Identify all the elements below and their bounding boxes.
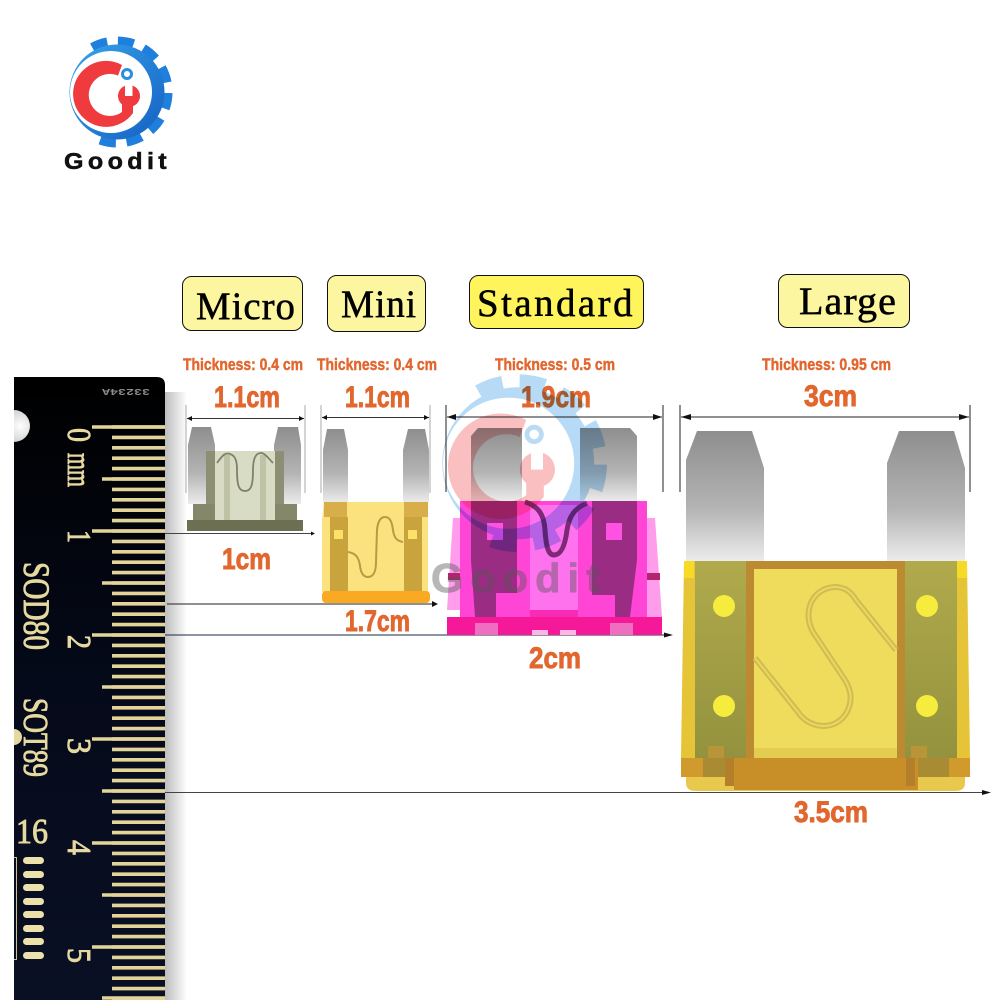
fuse base (681, 746, 970, 791)
fuse: Mini (322, 429, 430, 603)
thickness: Mini: Thickness: 0.4 cm (317, 356, 437, 374)
ruler scale numbers: 3 (60, 738, 97, 754)
ruler (0, 370, 165, 1000)
ruler part code: 33234A (101, 386, 150, 396)
fuse: Large (681, 431, 970, 791)
ruler package labels: SOD80 (15, 562, 56, 650)
fuse: Standard (447, 428, 662, 635)
thickness: Micro: Thickness: 0.4 cm (183, 356, 303, 374)
label: Mini (328, 276, 426, 332)
fuse: Micro (187, 427, 303, 531)
fuse body (681, 561, 970, 758)
width dimension: Standard 1.9cm: 1.9cm (521, 381, 591, 414)
width dimension: Mini 1.1cm (321, 381, 430, 493)
horizontal reference: 1.7cm line (167, 601, 438, 607)
width dimension: Micro 1.1cm: 1.1cm (214, 381, 280, 414)
label: Large (778, 274, 910, 328)
horizontal reference: 2cm line (165, 632, 673, 638)
ruler SOIC pads (14, 857, 44, 960)
fuse blades (686, 431, 965, 561)
logo wordmark: Goodit (64, 148, 171, 174)
ruler shadow (165, 392, 187, 1000)
ruler package labels: 16 (16, 812, 48, 851)
thickness: Large: Thickness: 0.95 cm (762, 356, 891, 374)
label: Standard: Standard (477, 282, 635, 325)
ruler package labels (14, 562, 56, 851)
width dimension: Large 3cm: 3cm (804, 380, 857, 413)
horizontal reference: 1cm line (165, 532, 315, 536)
width dimension: Mini 1.1cm: 1.1cm (345, 381, 410, 414)
dimension text: 3.5cm: 3.5cm (794, 796, 868, 829)
dimension text: 1.7cm: 1.7cm (345, 605, 410, 638)
label: Mini: Mini (341, 283, 417, 326)
ruler scale numbers (60, 428, 97, 963)
dimension text: 1cm: 1cm (222, 543, 271, 576)
ruler scale numbers: 5 (60, 948, 97, 963)
fuse rivets (713, 595, 938, 717)
horizontal reference: 3.5cm line (165, 790, 991, 795)
label: Micro: Micro (196, 285, 296, 328)
label: Large: Large (799, 280, 897, 323)
ruler scale numbers: mm (60, 453, 97, 487)
ruler scale numbers: 1 (60, 530, 97, 543)
width dimension: Large 3cm (680, 380, 970, 492)
ruler scale numbers: 2 (60, 635, 97, 649)
width dimension: Standard 1.9cm (446, 381, 663, 492)
watermark: Goodit text: Goodit (431, 555, 607, 601)
dimension text: 2cm: 2cm (529, 642, 581, 675)
label: Micro (182, 276, 302, 330)
ruler scale numbers: 4 (60, 840, 97, 855)
ruler package labels: SOT89 (16, 698, 55, 777)
watermark: Goodit logo (407, 352, 629, 574)
fuse S-shaped wire (755, 587, 896, 726)
width dimension: Micro 1.1cm (186, 381, 305, 493)
thickness: Standard: Thickness: 0.5 cm (495, 356, 615, 374)
icon: gear with wrench G (48, 23, 186, 161)
logo: Goodit (48, 23, 186, 174)
ruler scale numbers: 0 (60, 428, 97, 442)
